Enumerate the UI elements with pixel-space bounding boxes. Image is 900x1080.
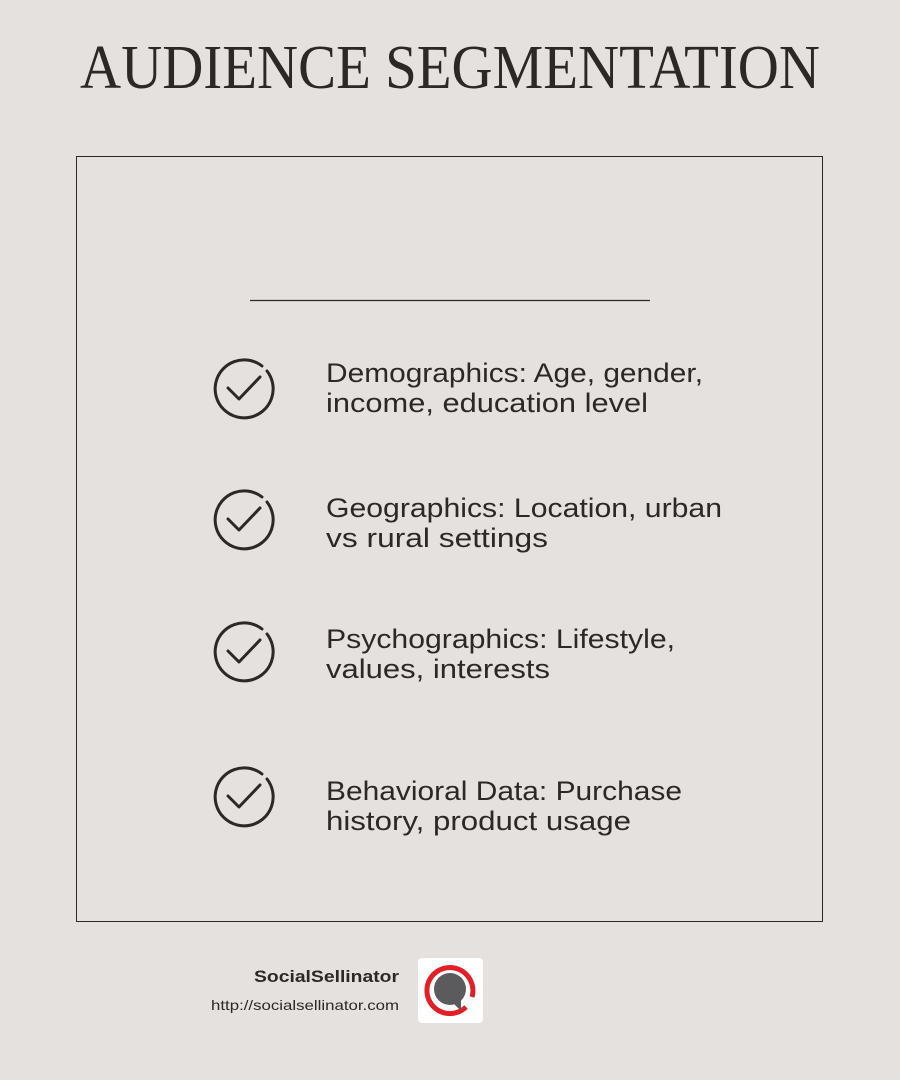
brand url: http://socialsellinator.com [211,997,399,1013]
icon: check circle [215,360,273,418]
panel: segmentation list [76,156,822,922]
text: psychographics: Psychographics: Lifestyle, [326,624,675,654]
text: behavioral: history, product usage [326,806,631,836]
icon: logo [418,958,483,1023]
text: behavioral: Behavioral Data: Purchase [326,776,682,806]
icon: check circle [215,491,273,549]
item: geographics [215,491,722,553]
text: demographics: Demographics: Age, gender, [326,358,703,388]
item: behavioral [215,768,682,836]
text: demographics: income, education level [326,388,648,418]
item: psychographics [215,623,675,684]
brand name: SocialSellinator [254,967,399,986]
text: geographics: vs rural settings [326,523,548,553]
icon: check circle [215,623,273,681]
text: psychographics: values, interests [326,654,550,684]
footer: brand [211,958,483,1023]
item: demographics [215,358,703,418]
title: AUDIENCE SEGMENTATION [80,34,820,102]
icon: check circle [215,768,273,826]
text: geographics: Geographics: Location, urban [326,493,722,523]
